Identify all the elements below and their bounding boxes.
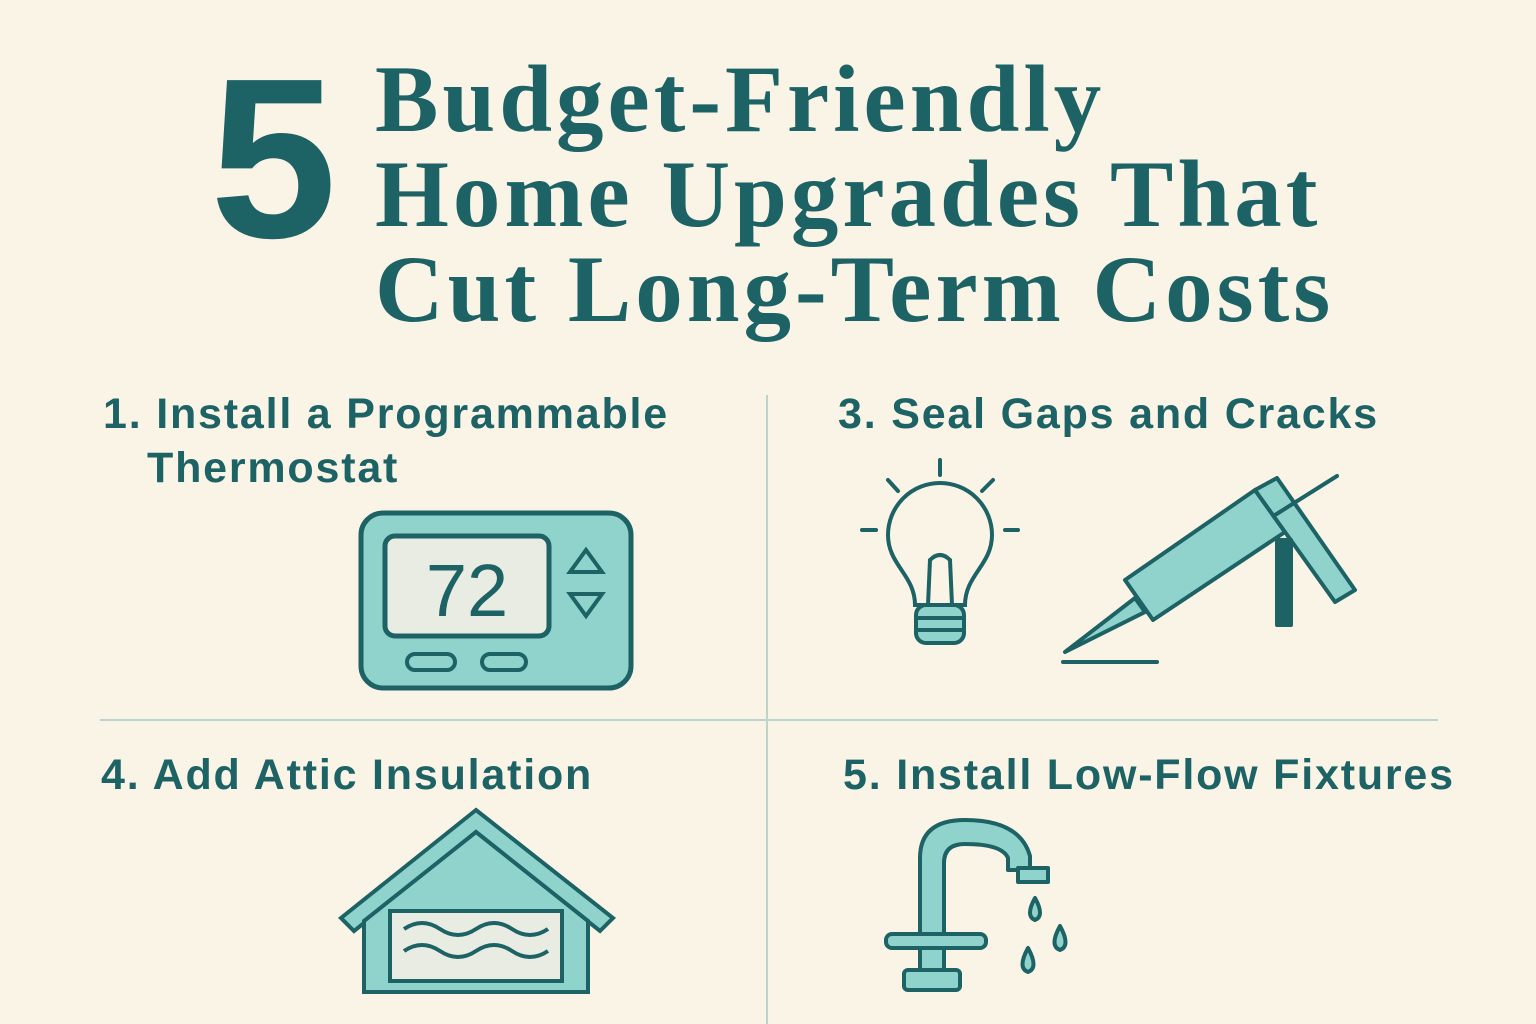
title text: Cut Long-Term Costs xyxy=(375,236,1334,342)
heading 1: 1. Install a Programmable xyxy=(103,390,669,438)
icon: insulated house xyxy=(338,808,616,994)
title text xyxy=(375,46,1334,342)
heading 1 xyxy=(103,390,669,492)
heading 4: 4. Add Attic Insulation xyxy=(101,751,593,799)
icon: thermostat xyxy=(358,510,634,690)
dividers xyxy=(766,395,768,1024)
heading 1: Thermostat xyxy=(147,444,399,492)
title text: Budget-Friendly xyxy=(375,46,1105,152)
heading 3: 3. Seal Gaps and Cracks xyxy=(838,390,1379,438)
icon: faucet xyxy=(884,818,1068,992)
title number 5: 5 xyxy=(210,32,337,286)
icon: light bulb xyxy=(860,458,1020,645)
icon: thermostat: 72 xyxy=(426,549,508,632)
heading 5: 5. Install Low-Flow Fixtures xyxy=(843,751,1455,799)
icon: caulk gun xyxy=(1061,474,1358,664)
title text: Home Upgrades That xyxy=(375,141,1321,247)
